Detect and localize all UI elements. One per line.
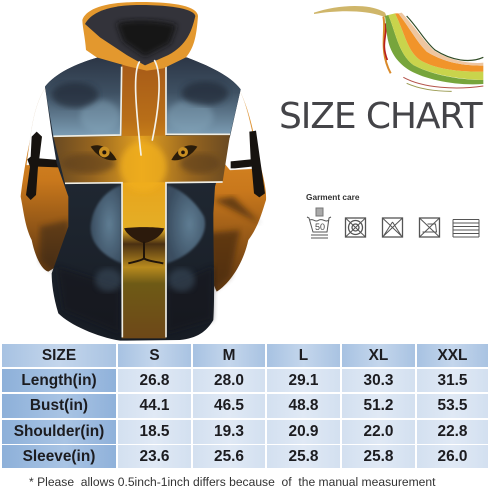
row: shoulder: 18.5 (140, 422, 169, 440)
header row: XXL (438, 346, 467, 364)
heading: garment care: Garment care (306, 192, 360, 202)
panel: vertical cross bar (122, 65, 166, 338)
header row: XL (369, 346, 388, 364)
row: length: Length(in) (21, 372, 97, 388)
icon: black cross on right sleeve (231, 131, 265, 197)
row: length: 30.3 (364, 372, 393, 388)
row: sleeve (2, 445, 488, 468)
icon: lion right eye (171, 145, 197, 160)
row: length: 28.0 (214, 372, 244, 388)
hood drawstrings (136, 61, 159, 155)
row: bust: Bust(in) (30, 397, 88, 414)
row: bust (2, 394, 488, 418)
row: bust: 51.2 (364, 397, 393, 414)
header row: M (223, 346, 235, 364)
panel: lower lion muzzle in blue (57, 185, 213, 333)
icon: do not iron (420, 218, 440, 237)
yellow (388, 13, 483, 80)
panel: upper blue quadrants (45, 57, 241, 136)
orange (395, 13, 483, 72)
header row: SIZE (42, 346, 76, 364)
header row: L (299, 346, 308, 364)
row: length: 26.8 (140, 372, 169, 388)
icons: garment care symbols (306, 208, 480, 238)
row: length: 31.5 (438, 372, 467, 388)
left sleeve (21, 88, 77, 272)
row: shoulder: 19.3 (214, 422, 244, 440)
hood (82, 2, 198, 71)
icon: wash at 50 (307, 208, 331, 238)
icon: do not bleach (382, 218, 402, 237)
icon: lion left eye (91, 145, 117, 160)
row: length (2, 369, 488, 392)
row: sleeve: Sleeve(in) (23, 448, 95, 464)
icon: black cross on left sleeve (26, 132, 59, 200)
right sleeve (200, 90, 266, 292)
row: bust: 44.1 (140, 397, 169, 414)
row: sleeve: 25.6 (214, 448, 244, 464)
header row: S (149, 346, 160, 364)
row: bust: 53.5 (438, 397, 467, 414)
row: sleeve: 26.0 (438, 448, 467, 464)
panel: horizontal cross bar with lion eyes (53, 135, 230, 192)
row: shoulder: 22.0 (364, 422, 393, 440)
row: bust: 48.8 (289, 397, 318, 414)
green (385, 15, 483, 84)
icon: do not tumble dry (346, 218, 366, 237)
title: SIZE CHART (279, 96, 482, 137)
row: shoulder: 20.9 (289, 422, 318, 440)
icon: dry flat lines (453, 220, 479, 237)
white cross outline (53, 67, 230, 337)
row: bust: 46.5 (214, 397, 244, 414)
header row (2, 344, 488, 367)
row: sleeve: 23.6 (140, 448, 169, 464)
row: sleeve: 25.8 (364, 448, 393, 464)
icon: wash at 50: 50 (315, 222, 325, 232)
hoodie body (45, 57, 241, 341)
peach (398, 13, 483, 66)
decorative swoosh ribbons (314, 6, 484, 92)
table: size chart (2, 344, 488, 468)
icon: lion nose and mouth (124, 227, 164, 263)
row: shoulder (2, 420, 488, 444)
row: sleeve: 25.8 (289, 448, 318, 464)
row: shoulder: Shoulder(in) (14, 422, 104, 440)
illustration: lion cross hoodie (20, 2, 266, 341)
row: shoulder: 22.8 (438, 422, 467, 440)
row: length: 29.1 (289, 372, 318, 388)
